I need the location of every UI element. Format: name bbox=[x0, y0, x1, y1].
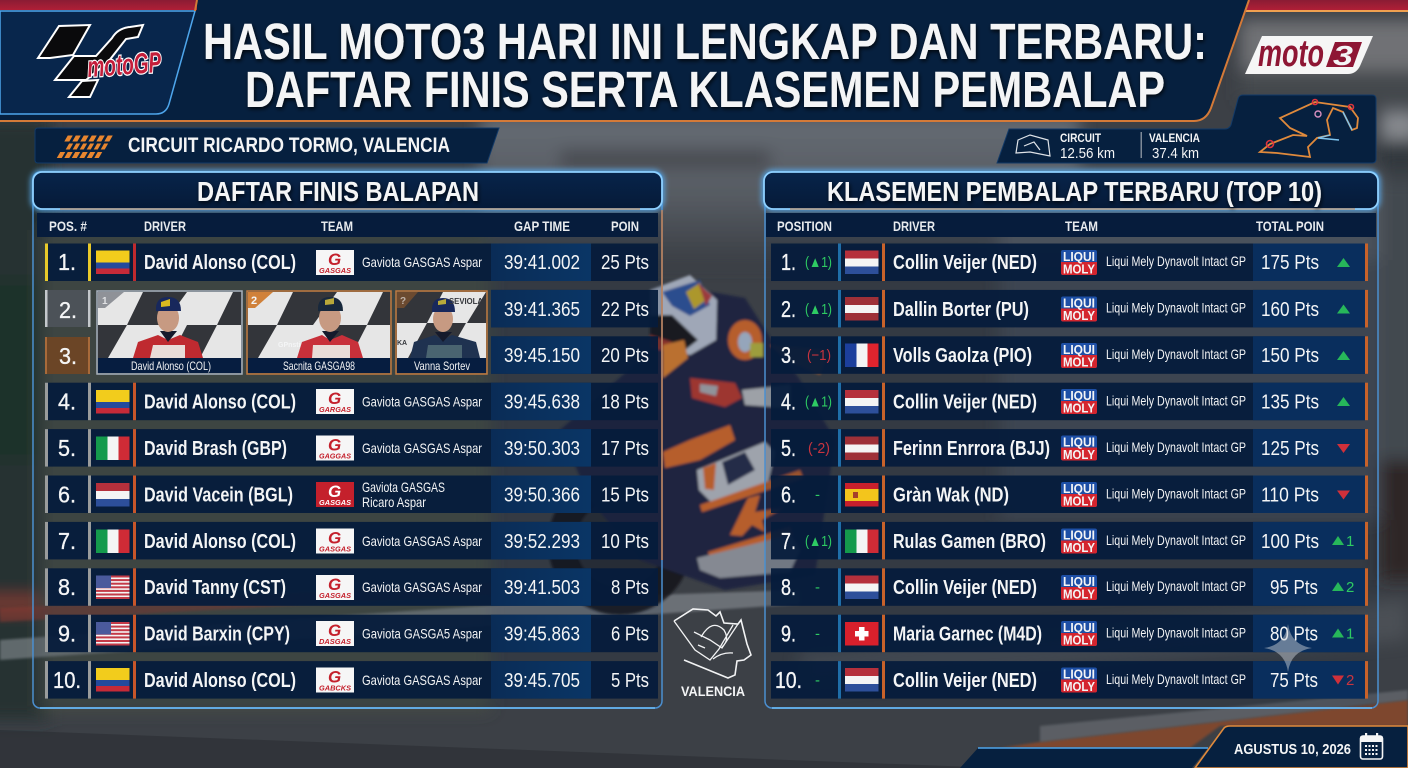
standings row 10: Collin Veijer (NED) bbox=[893, 670, 1037, 692]
logo: Liqui Moly: MOLY bbox=[1063, 634, 1096, 648]
logo: Liqui Moly: LIQUI bbox=[1063, 482, 1095, 496]
valencia track outline: VALENCIA bbox=[681, 683, 745, 699]
logo: Liqui Moly: LIQUI bbox=[1063, 668, 1095, 682]
logo: Liqui Moly bbox=[1061, 621, 1097, 648]
flag: Latvia bbox=[845, 297, 878, 320]
standings row 5: Liqui Mely Dynavolt Intact GP bbox=[1106, 439, 1246, 455]
logo: MotoGP bbox=[38, 25, 163, 97]
logo: Liqui Moly: MOLY bbox=[1063, 541, 1096, 555]
standings row 7: 7. bbox=[781, 528, 796, 554]
logo: GASGAS bbox=[316, 668, 354, 692]
right panel heading: KLASEMEN PEMBALAP TERBARU (TOP 10) bbox=[827, 176, 1322, 207]
trend arrow up with change bbox=[1332, 579, 1354, 596]
finish row 6: Gaviota GASGAS bbox=[362, 479, 445, 495]
standings row 1: (▲1) bbox=[805, 254, 832, 271]
finish row 1 bbox=[45, 244, 658, 281]
standings row 9 bbox=[771, 615, 1368, 652]
standings row 6: 6. bbox=[781, 482, 796, 508]
standings row 7: Liqui Mely Dynavolt Intact GP bbox=[1106, 532, 1246, 548]
finish rows 2 and 3 with podium photos: 22 Pts bbox=[601, 299, 649, 321]
standings row 4: 135 Pts bbox=[1261, 392, 1319, 414]
flag: Spain bbox=[845, 483, 878, 506]
circuit name banner: CIRCUIT RICARDO TORMO, VALENCIA bbox=[128, 134, 450, 157]
standings row 3 bbox=[771, 336, 1368, 374]
logo: GASGAS red bbox=[316, 482, 354, 507]
logo: Liqui Moly bbox=[1061, 575, 1097, 602]
podium photo 2: 2 bbox=[251, 295, 257, 307]
flag: Italy bbox=[96, 530, 130, 553]
left panel heading: DAFTAR FINIS BALAPAN bbox=[197, 176, 479, 207]
logo: GASGAS bbox=[316, 250, 354, 275]
logo: Liqui Moly bbox=[1061, 250, 1097, 276]
icon: orange checkered wing bbox=[57, 138, 112, 155]
finish row 7: 39:52.293 bbox=[504, 531, 580, 553]
standings row 2: Liqui Mely Dynavolt Intact GP bbox=[1106, 300, 1246, 316]
logo: GASGAS: G bbox=[328, 668, 341, 686]
finish rows 2 and 3 with podium photos: 20 Pts bbox=[601, 345, 649, 367]
finish row 7: David Alonso (COL) bbox=[144, 531, 296, 553]
finish row 7 bbox=[45, 522, 658, 559]
logo: GASGAS bbox=[316, 389, 354, 414]
podium photo 1: 1 bbox=[102, 296, 108, 307]
finish row 6: 15 Pts bbox=[601, 484, 649, 506]
trend arrow up with change: 2 bbox=[1346, 579, 1354, 596]
standings row 1 bbox=[771, 244, 1368, 281]
finish rows 2 and 3 with podium photos bbox=[45, 290, 658, 374]
finish row 10: 5 Pts bbox=[611, 670, 649, 692]
standings row 8: 8. bbox=[781, 574, 796, 600]
finish row 6: 39:50.366 bbox=[504, 484, 580, 506]
logo: Liqui Moly: MOLY bbox=[1063, 494, 1096, 508]
standings row 1: 175 Pts bbox=[1261, 252, 1319, 274]
finish row 4: Gaviota GASGAS Aspar bbox=[362, 394, 482, 410]
standings row 5: 125 Pts bbox=[1261, 438, 1319, 460]
logo: Liqui Moly: MOLY bbox=[1063, 356, 1096, 370]
left column headers: POS. # bbox=[49, 218, 87, 234]
finish row 6 bbox=[45, 476, 658, 513]
trend arrow up bbox=[1337, 397, 1350, 406]
standings row 3: Volls Gaolza (PIO) bbox=[893, 345, 1032, 367]
trend arrow down with change bbox=[1332, 672, 1354, 689]
position 3 box bbox=[45, 337, 90, 374]
standings row 2 bbox=[771, 290, 1368, 327]
flag: Netherlands bbox=[845, 390, 878, 414]
standings row 10: Liqui Mely Dynavolt Intact GP bbox=[1106, 671, 1246, 687]
icon: orange track map bbox=[1260, 100, 1358, 157]
logo: GASGAS: GASGAS bbox=[319, 266, 351, 275]
standings row 4: Collin Veijer (NED) bbox=[893, 392, 1037, 414]
flag: Italy bbox=[96, 436, 130, 460]
podium photo 3: SEVIOLA bbox=[449, 297, 483, 306]
position 3 box: 3. bbox=[59, 343, 77, 369]
logo: Moto3: moto bbox=[1258, 33, 1324, 75]
logo: Liqui Moly: MOLY bbox=[1063, 309, 1096, 323]
finish row 9 bbox=[45, 615, 658, 652]
standings row 6: 110 Pts bbox=[1261, 484, 1319, 506]
icon: mini circuit bbox=[1016, 135, 1050, 156]
standings row 4: 4. bbox=[781, 388, 796, 414]
logo: Liqui Moly bbox=[1061, 528, 1097, 555]
flag: USA bbox=[96, 622, 130, 646]
trend arrow down bbox=[1337, 490, 1350, 500]
standings row 8: 95 Pts bbox=[1270, 577, 1318, 599]
finish row 9: 39:45.863 bbox=[504, 624, 580, 646]
standings row 1: 1. bbox=[781, 249, 796, 275]
right column headers: TOTAL POIN bbox=[1256, 218, 1324, 234]
logo: Moto3: 3 bbox=[1333, 40, 1354, 71]
finish row 7: 10 Pts bbox=[601, 531, 649, 553]
standings row 7: (▲1) bbox=[805, 533, 832, 550]
logo: GASGAS: GABCKS bbox=[319, 684, 351, 692]
finish row 9: 9. bbox=[58, 620, 76, 646]
logo: Liqui Moly: LIQUI bbox=[1063, 296, 1095, 310]
flag: Netherlands bbox=[845, 250, 878, 274]
logo: Liqui Moly: MOLY bbox=[1063, 402, 1096, 416]
flag: Netherlands bbox=[845, 576, 878, 599]
standings row 6 bbox=[771, 476, 1368, 513]
finish row 6: David Vacein (BGL) bbox=[144, 484, 293, 506]
logo: GASGAS: GASGAS bbox=[319, 591, 351, 600]
finish row 4 bbox=[45, 383, 658, 420]
trend arrow up with change bbox=[1332, 533, 1354, 550]
logo: GASGAS: DASGAS bbox=[319, 637, 351, 646]
finish row 5 bbox=[45, 429, 658, 467]
logo: GASGAS bbox=[316, 575, 354, 600]
finish row 7: 7. bbox=[58, 528, 76, 554]
finish row 9: 6 Pts bbox=[611, 624, 649, 646]
logo: Liqui Moly: LIQUI bbox=[1063, 389, 1095, 403]
finish row 1: 39:41.002 bbox=[504, 252, 580, 274]
finish rows 2 and 3 with podium photos: 39:41.365 bbox=[504, 299, 580, 321]
standings row 5: (-2) bbox=[808, 440, 830, 457]
flag: Italy bbox=[845, 530, 878, 553]
flag: Latvia bbox=[845, 436, 878, 460]
left panel heading bbox=[33, 172, 662, 209]
standings row 7: 100 Pts bbox=[1261, 531, 1319, 553]
motorcycle and rider photo bbox=[548, 275, 835, 615]
flag: Colombia bbox=[96, 668, 130, 692]
standings row 5 bbox=[771, 429, 1368, 467]
logo: Liqui Moly bbox=[1061, 436, 1097, 462]
logo: Liqui Moly bbox=[1061, 343, 1097, 370]
logo: Liqui Moly bbox=[1061, 389, 1097, 416]
finish row 10: 39:45.705 bbox=[504, 670, 580, 692]
finish row 10: Gaviota GASGAS Aspar bbox=[362, 672, 482, 688]
logo: GASGAS red: G bbox=[328, 482, 341, 501]
logo: Liqui Moly: LIQUI bbox=[1063, 250, 1095, 264]
finish row 8: 8 Pts bbox=[611, 577, 649, 599]
finish row 9: Gaviota GASGA5 Aspar bbox=[362, 626, 482, 642]
podium photo 3: ? bbox=[400, 296, 406, 307]
left column headers: DRIVER bbox=[144, 218, 186, 234]
standings row 3: (−1) bbox=[807, 347, 831, 364]
logo: GASGAS bbox=[316, 621, 354, 646]
finish row 7: Gaviota GASGAS Aspar bbox=[362, 533, 482, 549]
finish row 5: 39:50.303 bbox=[504, 438, 580, 460]
finish row 10: 10. bbox=[53, 667, 81, 693]
finish row 10 bbox=[45, 661, 658, 699]
position 2 box: 2. bbox=[59, 297, 77, 323]
left panel: daftar finis balapan bbox=[33, 172, 662, 708]
logo: Liqui Moly bbox=[1061, 482, 1097, 508]
logo: Liqui Moly bbox=[1061, 296, 1097, 323]
logo: GASGAS: G bbox=[328, 436, 341, 454]
finish row 1: David Alonso (COL) bbox=[144, 252, 296, 274]
standings row 4: (▲1) bbox=[805, 394, 832, 410]
standings row 8: Collin Veijer (NED) bbox=[893, 577, 1037, 599]
standings row 6: - bbox=[815, 486, 820, 504]
standings row 9: 80 Pts bbox=[1270, 624, 1318, 646]
finish row 1: 25 Pts bbox=[601, 252, 649, 274]
logo: GASGAS bbox=[316, 528, 354, 554]
standings row 10: 10. bbox=[775, 667, 802, 693]
flag: Switzerland bbox=[845, 622, 878, 646]
flag: Netherlands bbox=[845, 668, 878, 692]
circuit info panel: VALENCIA bbox=[1149, 131, 1200, 145]
logo: GASGAS bbox=[316, 436, 354, 460]
finish row 1: Gaviota GASGAS Aspar bbox=[362, 254, 482, 270]
logo: Liqui Moly bbox=[1061, 668, 1097, 694]
logo: GASGAS: G bbox=[328, 250, 341, 269]
finish row 8: 39:41.503 bbox=[504, 577, 580, 599]
finish row 4: 4. bbox=[58, 388, 76, 414]
logo: Liqui Moly: MOLY bbox=[1063, 588, 1096, 602]
finish row 8: David Tanny (CST) bbox=[144, 577, 286, 599]
standings row 10: 75 Pts bbox=[1270, 670, 1318, 692]
standings row 6: Liqui Mely Dynavolt Intact GP bbox=[1106, 486, 1246, 502]
finish row 5: 5. bbox=[58, 435, 76, 461]
standings row 9: Liqui Mely Dynavolt Intact GP bbox=[1106, 624, 1246, 640]
trend arrow down bbox=[1337, 444, 1350, 453]
standings row 2: 160 Pts bbox=[1261, 299, 1319, 321]
circuit info panel: CIRCUIT bbox=[1060, 131, 1102, 145]
circuit info panel: 37.4 km bbox=[1152, 145, 1199, 162]
podium photo 1 bbox=[97, 291, 242, 374]
right column headers bbox=[766, 213, 1376, 237]
standings row 9: 9. bbox=[781, 620, 796, 646]
finish row 5: David Brash (GBP) bbox=[144, 438, 287, 460]
valencia track outline bbox=[674, 609, 751, 699]
standings row 9: - bbox=[815, 626, 820, 642]
standings row 2: Dallin Borter (PU) bbox=[893, 299, 1029, 321]
finish row 4: David Alonso (COL) bbox=[144, 392, 296, 414]
logo: GASGAS: GARGAS bbox=[319, 405, 351, 414]
logo: Liqui Moly: LIQUI bbox=[1063, 621, 1095, 635]
standings row 5: Ferinn Enrrora (BJJ) bbox=[893, 438, 1050, 460]
logo: Liqui Moly: MOLY bbox=[1063, 680, 1096, 694]
standings row 8: Liqui Mely Dynavolt Intact GP bbox=[1106, 578, 1246, 594]
footer date bar bbox=[960, 726, 1408, 768]
flag: Colombia bbox=[96, 250, 130, 274]
circuit name banner bbox=[35, 128, 499, 163]
flag: Colombia bbox=[96, 390, 130, 414]
finish row 8: 8. bbox=[58, 574, 76, 600]
standings row 10 bbox=[771, 661, 1368, 699]
right panel: klasemen pembalap bbox=[764, 172, 1378, 708]
podium photo 2 bbox=[247, 291, 391, 374]
trend arrow up with change: 1 bbox=[1346, 533, 1354, 550]
standings row 2: (▲1) bbox=[805, 301, 832, 318]
standings row 6: Gràn Wak (ND) bbox=[893, 484, 1009, 506]
standings row 10: - bbox=[815, 672, 820, 689]
logo panel bbox=[0, 11, 195, 114]
logo: GASGAS: G bbox=[328, 575, 341, 594]
standings row 8 bbox=[771, 568, 1368, 606]
standings row 4: Liqui Mely Dynavolt Intact GP bbox=[1106, 392, 1246, 408]
flag: Netherlands bbox=[96, 483, 130, 506]
logo: Liqui Moly: MOLY bbox=[1063, 262, 1096, 276]
standings row 3: 3. bbox=[781, 342, 796, 368]
standings row 8: - bbox=[815, 579, 820, 596]
finish row 5: Gaviota GASGAS Aspar bbox=[362, 440, 482, 456]
trend arrow up bbox=[1337, 258, 1350, 267]
flag: USA bbox=[96, 576, 130, 599]
trend arrow up with change: 1 bbox=[1346, 626, 1354, 642]
logo: GASGAS: G bbox=[328, 621, 341, 640]
standings row 9: Maria Garnec (M4D) bbox=[893, 624, 1042, 646]
standings row 7: Rulas Gamen (BRO) bbox=[893, 531, 1046, 553]
trend arrow down with change: 2 bbox=[1346, 672, 1354, 689]
finish row 9: David Barxin (CPY) bbox=[144, 624, 290, 646]
standings row 5: 5. bbox=[781, 435, 796, 461]
finish rows 2 and 3 with podium photos: 39:45.150 bbox=[504, 345, 580, 367]
logo: GASGAS: G bbox=[328, 389, 341, 408]
icon: calendar bbox=[1360, 733, 1382, 759]
right column headers: DRIVER bbox=[893, 218, 935, 234]
trend arrow up bbox=[1337, 351, 1350, 360]
position 2 box bbox=[45, 290, 90, 327]
left column headers bbox=[37, 213, 658, 237]
logo: GASGAS: GAGGAS bbox=[319, 452, 351, 460]
trend arrow up with change bbox=[1332, 626, 1354, 642]
logo: Liqui Moly: LIQUI bbox=[1063, 436, 1095, 450]
podium photo 3: Vanna Sortev bbox=[414, 359, 470, 373]
logo: GASGAS: GASGAS bbox=[319, 544, 351, 554]
standings row 3: Liqui Mely Dynavolt Intact GP bbox=[1106, 346, 1246, 362]
right column headers: TEAM bbox=[1065, 218, 1098, 234]
title: HASIL MOTO3 HARI INI LENGKAP DAN TERBARU: bbox=[203, 13, 1207, 70]
finish row 10: David Alonso (COL) bbox=[144, 670, 296, 692]
circuit info panel: 12.56 km bbox=[1060, 145, 1115, 162]
standings row 2: 2. bbox=[781, 296, 796, 322]
left column headers: GAP TIME bbox=[514, 218, 570, 234]
logo: Liqui Moly: LIQUI bbox=[1063, 343, 1095, 357]
finish row 4: 39:45.638 bbox=[504, 392, 580, 414]
standings row 4 bbox=[771, 383, 1368, 420]
title: DAFTAR FINIS SERTA KLASEMEN PEMBALAP bbox=[245, 61, 1165, 118]
finish row 5: 17 Pts bbox=[601, 438, 649, 460]
finish row 8: Gaviota GASGAS Aspar bbox=[362, 579, 482, 595]
logo: MotoGP: motoGP bbox=[86, 47, 163, 84]
standings row 1: Collin Veijer (NED) bbox=[893, 252, 1037, 274]
logo: Liqui Moly: LIQUI bbox=[1063, 528, 1095, 542]
circuit info panel bbox=[997, 95, 1376, 163]
standings row 3: 150 Pts bbox=[1261, 345, 1319, 367]
logo: Liqui Moly: LIQUI bbox=[1063, 575, 1095, 589]
podium photo 2: Sacnita GASGA98 bbox=[283, 359, 355, 373]
podium photo 2: GPnsti bbox=[278, 342, 301, 349]
finish row 6: 6. bbox=[58, 482, 76, 508]
standings row 1: Liqui Mely Dynavolt Intact GP bbox=[1106, 253, 1246, 269]
left column headers: TEAM bbox=[321, 218, 353, 234]
header band bbox=[0, 0, 1408, 121]
finish row 1: 1. bbox=[58, 249, 76, 275]
finish row 6: Ricaro Aspar bbox=[362, 494, 426, 510]
logo: GASGAS: G bbox=[328, 528, 341, 548]
right column headers: POSITION bbox=[777, 218, 832, 234]
finish row 8 bbox=[45, 568, 658, 606]
podium photo 1: David Alonso (COL) bbox=[131, 359, 211, 373]
standings row 7 bbox=[771, 522, 1368, 559]
title bbox=[203, 13, 1207, 118]
podium photo 3 bbox=[396, 291, 487, 374]
podium photo 3: KA bbox=[397, 340, 407, 347]
left column headers: POIN bbox=[611, 218, 639, 234]
finish row 4: 18 Pts bbox=[601, 392, 649, 414]
logo: Liqui Moly: MOLY bbox=[1063, 448, 1096, 462]
footer date bar: AGUSTUS 10, 2026 bbox=[1234, 741, 1351, 758]
trend arrow up bbox=[1337, 304, 1350, 314]
flag: France bbox=[845, 344, 878, 367]
sparkle watermark bbox=[1264, 624, 1312, 672]
logo: GASGAS red: GASGAS bbox=[319, 498, 351, 507]
